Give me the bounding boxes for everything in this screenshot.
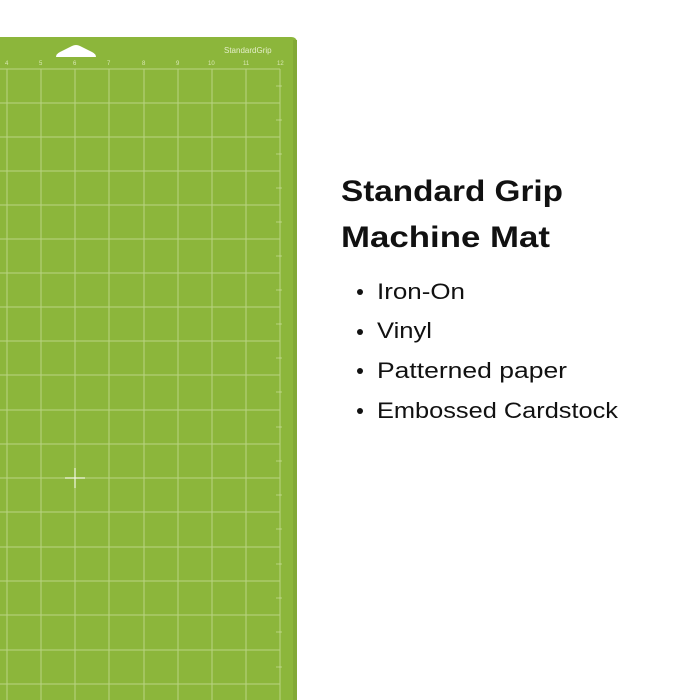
bullet: Iron-On: Iron-On: [377, 279, 465, 304]
ruler numbers: 5: [39, 61, 43, 67]
title: Machine Mat: [341, 221, 550, 254]
ruler numbers: 8: [142, 61, 146, 67]
mat label: StandardGrip: [224, 46, 272, 55]
ruler numbers: 12: [277, 61, 284, 67]
bullet: Iron-On: [357, 279, 465, 304]
panel: cutting mat: [0, 37, 297, 700]
icon: hanging notch: [56, 45, 96, 57]
ruler numbers: 4: [5, 61, 9, 67]
bullet list: [357, 279, 619, 423]
ruler numbers: 10: [208, 61, 215, 67]
ruler numbers: 11: [243, 61, 250, 67]
ruler numbers: 9: [176, 61, 180, 67]
icon: center cross: [65, 468, 85, 488]
bullet: Vinyl: Vinyl: [377, 318, 432, 343]
bullet: Vinyl: [357, 318, 432, 343]
ruler numbers: [5, 61, 284, 67]
title: [341, 175, 563, 254]
bullet: Embossed Cardstock: Embossed Cardstock: [377, 398, 619, 423]
ruler numbers: 7: [107, 61, 111, 67]
title: Standard Grip: [341, 175, 563, 208]
bullet: Patterned paper: Patterned paper: [377, 358, 567, 383]
ruler numbers: 6: [73, 61, 77, 67]
